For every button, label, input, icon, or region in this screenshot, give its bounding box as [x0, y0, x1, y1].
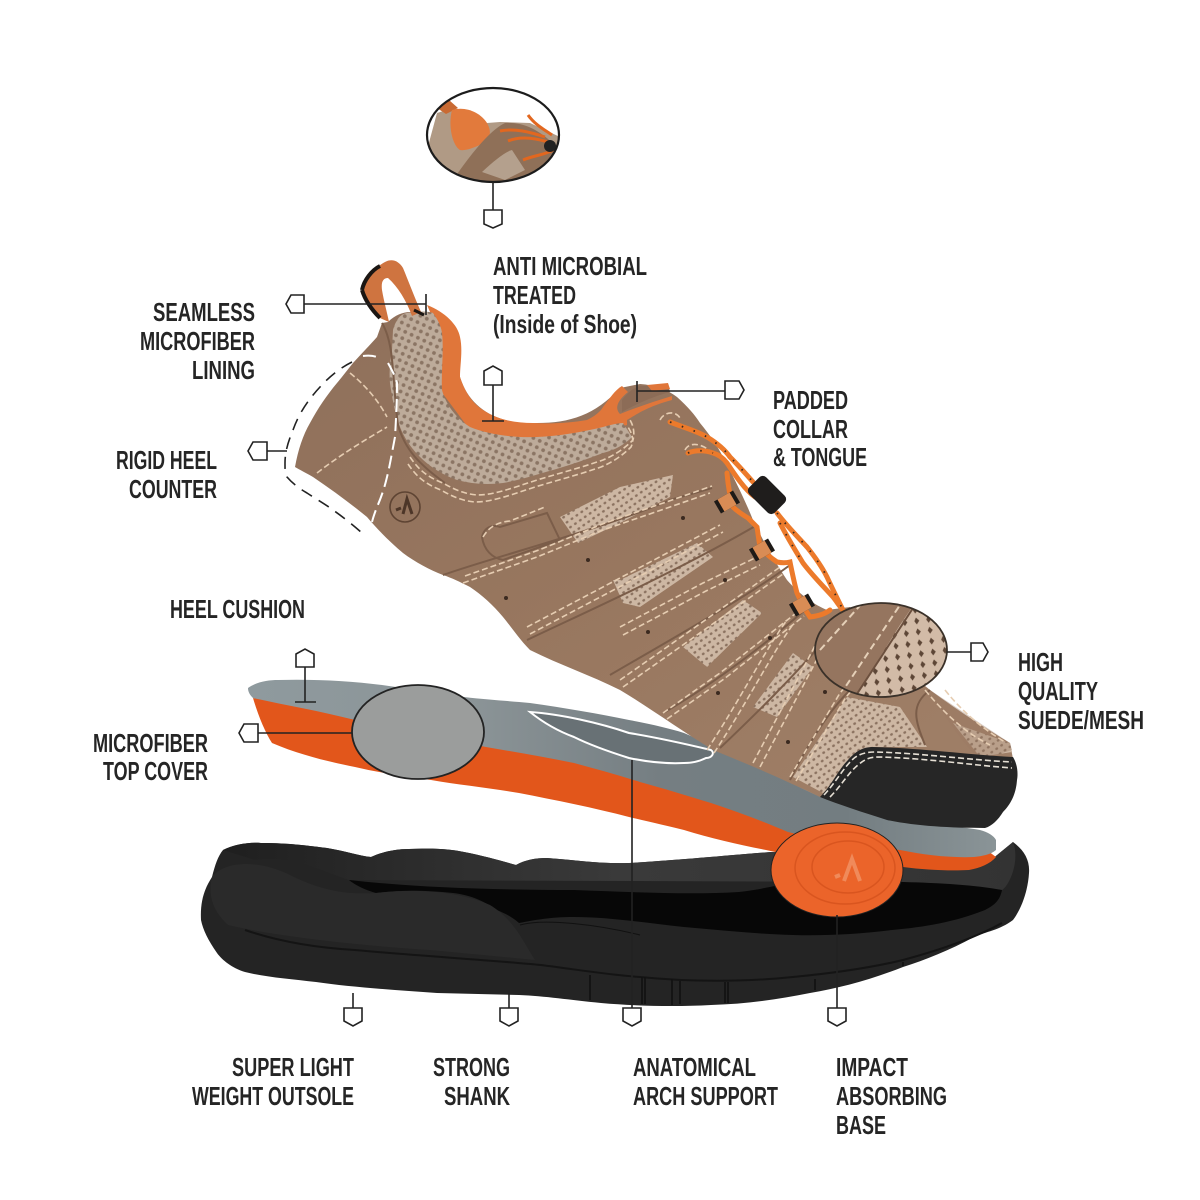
seams and folds: [382, 323, 930, 780]
callout line: base: [828, 915, 846, 1026]
label: shank: SHANK: [444, 1081, 510, 1111]
stitching: [410, 420, 634, 495]
label: high quality: [1018, 647, 1144, 735]
label: impact base: ABSORBING: [836, 1081, 947, 1111]
icon: pull tab: [362, 260, 424, 322]
label: anti microbial: (Inside of Shoe): [493, 309, 637, 339]
panel: shoe upper: [295, 305, 1018, 828]
toe cap: [820, 747, 1018, 828]
callout line: suede mesh: [947, 643, 988, 661]
label: high quality: SUEDE/MESH: [1018, 705, 1144, 735]
label: seamless: [140, 297, 255, 385]
label: microfiber top cover: MICROFIBER: [93, 728, 208, 758]
label: rigid heel: [116, 445, 217, 504]
label: high quality: HIGH: [1018, 647, 1063, 677]
heel wedge: [211, 864, 535, 960]
tongue: [622, 384, 670, 412]
label: outsole: WEIGHT OUTSOLE: [192, 1081, 354, 1111]
icon: brand badge: [390, 492, 420, 522]
callout line: padded collar: [637, 381, 744, 402]
panel: insole: [248, 680, 996, 870]
label: arch support: ARCH SUPPORT: [633, 1081, 778, 1111]
label: shank: [433, 1052, 510, 1111]
label: outsole: SUPER LIGHT: [232, 1052, 354, 1082]
panel: outsole: [201, 842, 1029, 1006]
callout: mesh closeup: [810, 600, 947, 700]
label: padded: PADDED: [773, 385, 848, 415]
label: padded: COLLAR: [773, 414, 848, 444]
label: anti microbial: TREATED: [493, 280, 576, 310]
label: rigid heel: COUNTER: [129, 474, 217, 504]
eyelet holes: [504, 516, 827, 744]
icon: toggle: [746, 474, 788, 516]
label: impact base: BASE: [836, 1110, 886, 1140]
icon: elastic laces: [670, 422, 843, 617]
heel white dashes: [363, 356, 397, 522]
label: anti microbial: ANTI MICROBIAL: [493, 251, 647, 281]
label: microfiber top cover: [93, 728, 208, 786]
callout: lace closeup: [427, 88, 560, 190]
mesh panels: [560, 475, 673, 543]
label: arch support: [633, 1052, 778, 1111]
label: arch support: ANATOMICAL: [633, 1052, 756, 1082]
inner wall: [223, 842, 1015, 890]
collar mesh: [390, 312, 632, 484]
callout line: inside: [482, 366, 504, 421]
label: seamless: LINING: [192, 355, 255, 385]
label: padded: & TONGUE: [773, 442, 867, 472]
callout line: outsole: [344, 993, 362, 1026]
callout line: arch: [623, 760, 641, 1026]
collar lining: [427, 305, 672, 440]
label: anti microbial: [493, 251, 647, 339]
callout line: rigid heel: [248, 442, 287, 460]
label: outsole: [192, 1052, 354, 1111]
callout line: shank: [500, 993, 518, 1026]
callout line: top cover: [239, 724, 352, 742]
callout line: anti microbial lens: [484, 182, 502, 228]
callout: base closeup: [771, 823, 903, 917]
arch outline: [530, 712, 713, 763]
label: high quality: QUALITY: [1018, 676, 1098, 706]
callout line: seamless lining: [286, 294, 426, 315]
icon: heel dashed outline: [285, 362, 362, 533]
label: shank: STRONG: [433, 1052, 510, 1082]
label: heel cushion: HEEL CUSHION: [170, 594, 305, 624]
side seam and lugs: [245, 923, 1002, 981]
label: rigid heel: RIGID HEEL: [116, 445, 217, 475]
callout line: heel cushion: [295, 649, 316, 702]
label: impact base: [836, 1052, 947, 1140]
label: microfiber top cover: TOP COVER: [103, 756, 208, 786]
label: impact base: IMPACT: [836, 1052, 908, 1082]
inner floor: [349, 880, 1002, 935]
callout: top cover closeup: [352, 685, 484, 779]
label: seamless: MICROFIBER: [140, 326, 255, 356]
label: padded: [773, 385, 867, 472]
label: seamless: SEAMLESS: [153, 297, 255, 327]
